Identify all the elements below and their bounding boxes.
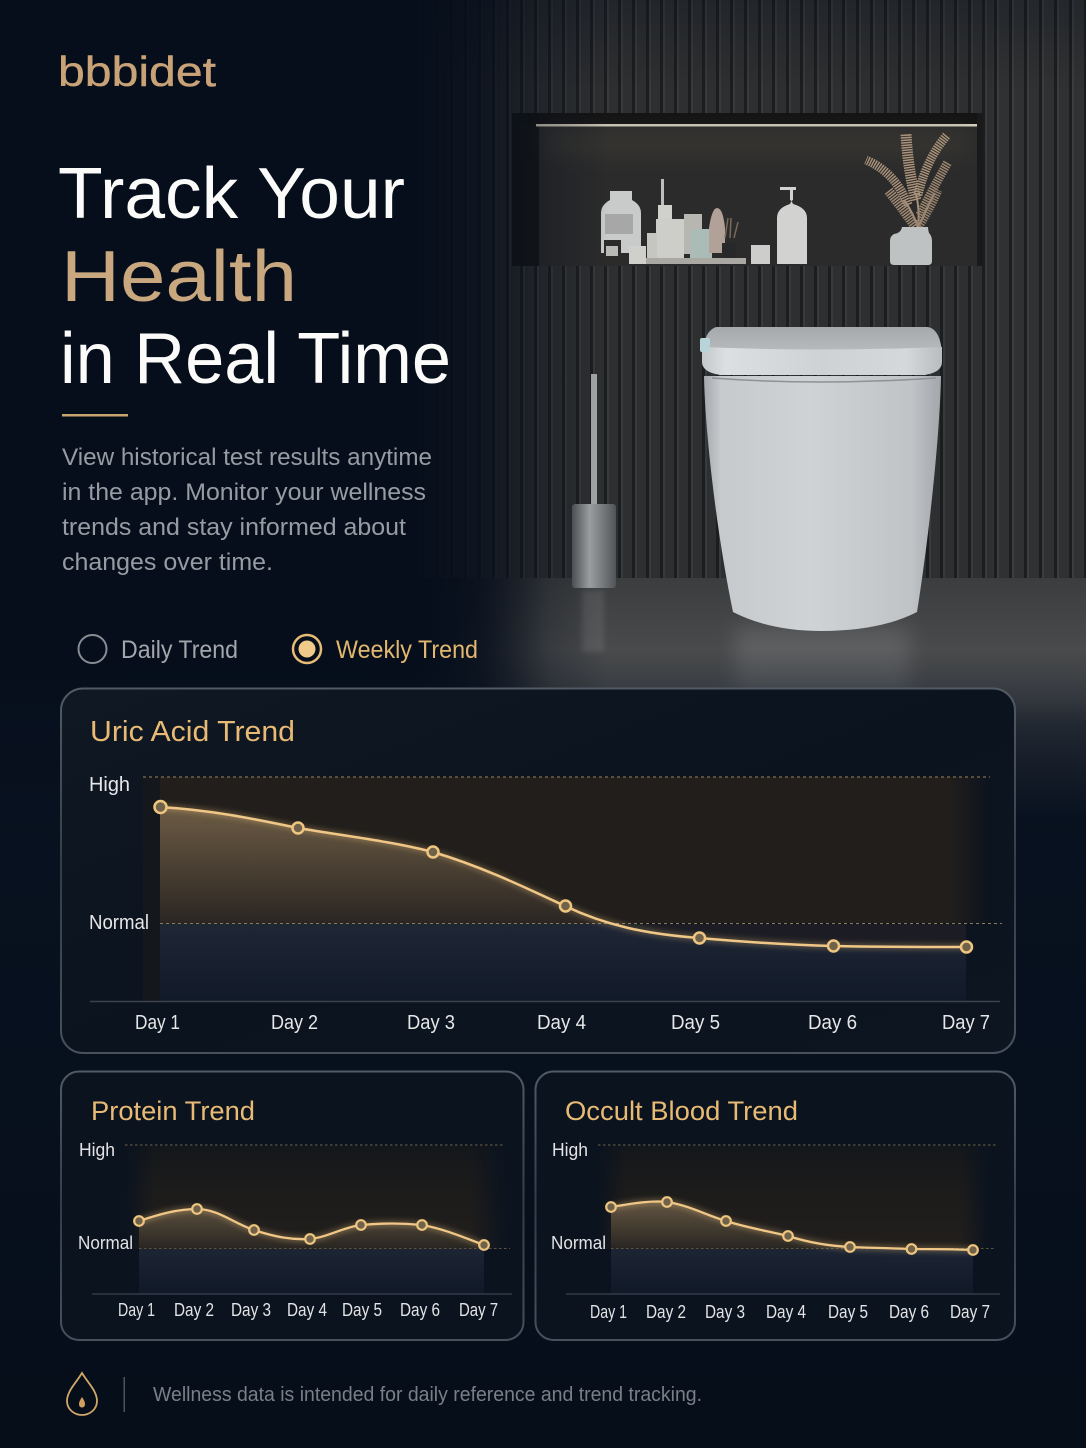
protein chart xyxy=(92,1145,512,1294)
axis labels: Day 2 xyxy=(174,1300,214,1320)
panel heading: Occult Blood Trend xyxy=(565,1096,798,1126)
dried plant in vase xyxy=(866,134,948,265)
headline: Health xyxy=(61,237,297,317)
axis labels: Day 3 xyxy=(705,1302,745,1322)
axis labels: Day 6 xyxy=(400,1300,440,1320)
occult blood chart xyxy=(566,1145,1000,1294)
gold divider xyxy=(62,414,128,416)
axis labels: Day 4 xyxy=(537,1012,586,1034)
floor xyxy=(400,578,1086,818)
icon: water drop xyxy=(67,1373,97,1415)
description paragraph: View historical test results anytime xyxy=(62,444,432,471)
axis labels: Day 4 xyxy=(766,1302,806,1322)
axis labels: Normal xyxy=(78,1233,133,1253)
axis labels: Day 1 xyxy=(590,1302,627,1322)
toggle: daily trend: Daily Trend xyxy=(121,636,238,664)
panel frame xyxy=(61,688,1015,1053)
toilet brush holder xyxy=(572,374,616,652)
headline: Track Your xyxy=(58,154,405,234)
axis labels: Day 1 xyxy=(135,1012,180,1034)
footer separator xyxy=(124,1377,125,1412)
brand logo: bbbidet xyxy=(58,48,216,95)
axis labels: Day 2 xyxy=(646,1302,686,1322)
description paragraph: in the app. Monitor your wellness xyxy=(62,479,426,506)
panel: uric acid trend xyxy=(61,688,1015,1053)
axis labels: Day 7 xyxy=(459,1300,498,1320)
headline xyxy=(58,154,451,399)
axis labels: Day 5 xyxy=(671,1012,720,1034)
uric acid chart xyxy=(90,777,1002,1002)
panel frame xyxy=(536,1072,1015,1340)
axis labels: High xyxy=(552,1140,588,1160)
panel: protein trend xyxy=(61,1072,524,1340)
ribbed wall xyxy=(400,0,1086,580)
axis labels: Day 6 xyxy=(889,1302,929,1322)
toggle: weekly trend selected: Weekly Trend xyxy=(336,636,478,664)
description paragraph xyxy=(62,444,432,576)
description paragraph: trends and stay informed about xyxy=(62,514,406,541)
footer disclaimer: Wellness data is intended for daily reference and trend tracking. xyxy=(153,1384,702,1406)
axis labels xyxy=(78,1140,498,1320)
description paragraph: changes over time. xyxy=(62,549,273,576)
axis labels: Day 7 xyxy=(942,1012,990,1034)
axis labels: Day 6 xyxy=(808,1012,857,1034)
wall niche shelf xyxy=(512,113,983,266)
axis labels xyxy=(89,774,990,1034)
panel heading: Uric Acid Trend xyxy=(90,716,295,748)
smart toilet xyxy=(700,327,942,695)
axis labels: Normal xyxy=(89,912,149,934)
axis labels xyxy=(551,1140,990,1322)
shelf bottles and accessories xyxy=(601,179,807,264)
headline: in Real Time xyxy=(60,319,451,399)
panel heading: Protein Trend xyxy=(91,1096,255,1126)
axis labels: Day 7 xyxy=(950,1302,990,1322)
axis labels: Day 5 xyxy=(342,1300,382,1320)
axis labels: Normal xyxy=(551,1233,606,1253)
axis labels: High xyxy=(79,1140,115,1160)
panel frame xyxy=(61,1072,524,1340)
axis labels: Day 4 xyxy=(287,1300,327,1320)
scene fade overlays xyxy=(0,0,1086,820)
bathroom scene photo xyxy=(0,0,1086,820)
axis labels: Day 2 xyxy=(271,1012,318,1034)
panel: occult blood trend xyxy=(536,1072,1015,1340)
axis labels: Day 3 xyxy=(231,1300,271,1320)
axis labels: Day 5 xyxy=(828,1302,868,1322)
axis labels: High xyxy=(89,774,130,796)
axis labels: Day 1 xyxy=(118,1300,155,1320)
axis labels: Day 3 xyxy=(407,1012,455,1034)
toggle: daily trend xyxy=(78,635,238,664)
